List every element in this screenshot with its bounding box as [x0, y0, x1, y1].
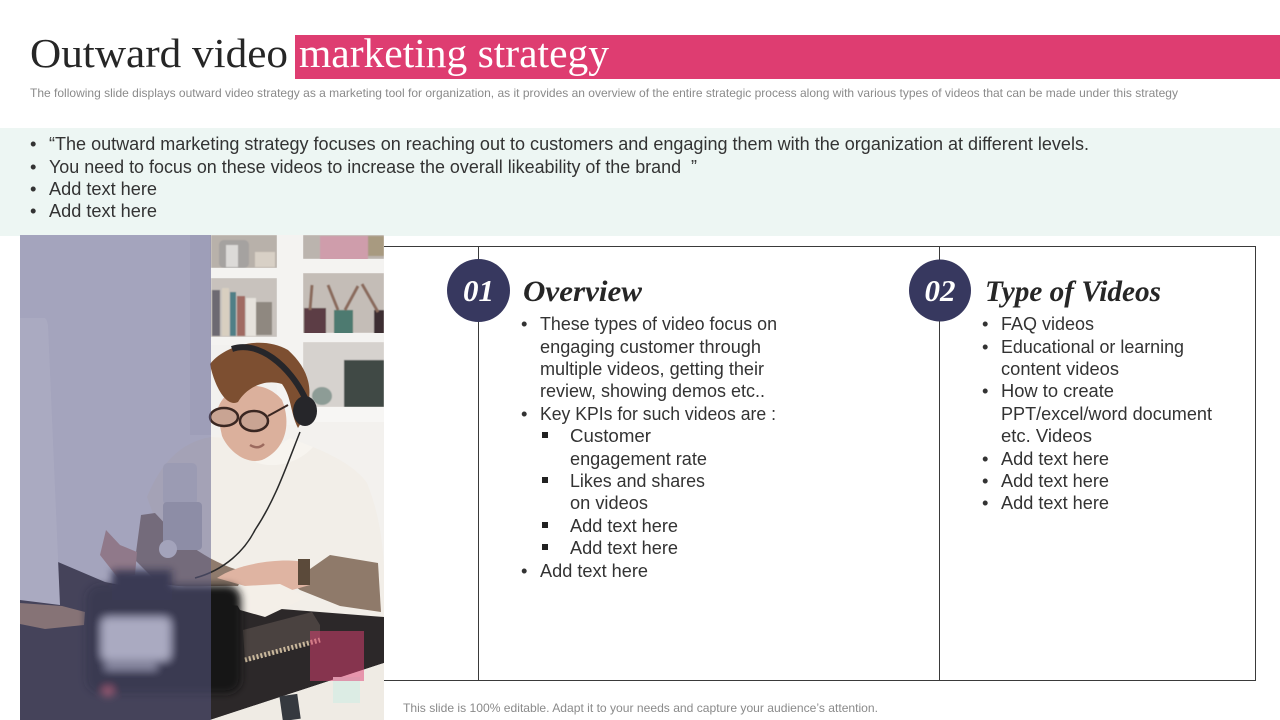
- video types bullet list: Educational or learning: [1001, 336, 1184, 357]
- title banner: [295, 35, 1280, 79]
- video types bullet list: content videos: [1001, 358, 1119, 379]
- number badge 01: 01: [463, 273, 494, 308]
- overview bullet list: •: [521, 403, 527, 424]
- content frame: [384, 246, 1256, 680]
- video types bullet list: •: [982, 336, 988, 357]
- quote band: [0, 128, 1280, 236]
- quote band: •: [30, 156, 36, 177]
- overview bullet list: Key KPIs for such videos are :: [540, 403, 776, 424]
- title: marketing strategy: [299, 30, 609, 76]
- panel: overview: [447, 259, 777, 581]
- quote band: •: [30, 133, 36, 154]
- video types bullet list: PPT/excel/word document: [1001, 403, 1212, 424]
- video types bullet list: •: [982, 380, 988, 401]
- overview bullet list: Add text here: [540, 560, 648, 581]
- desk: [20, 562, 384, 720]
- subtitle: The following slide displays outward video strategy as a marketing tool for organization, as it provides an overview of the entire strategic process along with various types of videos that can be made under this strategy: [30, 86, 1178, 100]
- pink accent square: [310, 631, 364, 681]
- title: [30, 30, 609, 76]
- quote band: “The outward marketing strategy focuses on reaching out to customers and engaging them with the organization at different levels.: [49, 133, 1089, 154]
- video types bullet list: •: [982, 470, 988, 491]
- microphone: [163, 463, 197, 505]
- camera: [86, 570, 241, 697]
- video types bullet list: •: [982, 313, 988, 334]
- video types bullet list: etc. Videos: [1001, 425, 1092, 446]
- footer note: This slide is 100% editable. Adapt it to your needs and capture your audience’s attention.: [403, 701, 878, 715]
- overview bullet list: on videos: [570, 492, 648, 513]
- overview bullet list: Likes and shares: [570, 470, 705, 491]
- overview bullet list: These types of video focus on: [540, 313, 777, 334]
- quote band: Add text here: [49, 178, 157, 199]
- heading: type of videos: Type of Videos: [985, 275, 1161, 308]
- overview bullet list: Add text here: [570, 515, 678, 536]
- overview bullet list: multiple videos, getting their: [540, 358, 764, 379]
- video types bullet list: Add text here: [1001, 492, 1109, 513]
- video types bullet list: •: [982, 448, 988, 469]
- number badge 01: [447, 259, 510, 322]
- number badge 02: 02: [924, 273, 956, 308]
- video types bullet list: How to create: [1001, 380, 1114, 401]
- overview bullet list: Customer: [570, 425, 651, 446]
- video types bullet list: FAQ videos: [1001, 313, 1094, 334]
- overview bullet list: •: [521, 560, 527, 581]
- overview bullet list: engaging customer through: [540, 336, 761, 357]
- woman's face and headphones: [217, 386, 286, 461]
- quote band: You need to focus on these videos to increase the overall likeability of the brand ”: [49, 156, 697, 177]
- heading: overview: Overview: [523, 275, 643, 308]
- video types bullet list: Add text here: [1001, 470, 1109, 491]
- overview bullet list: [521, 313, 777, 581]
- sweater: [147, 437, 384, 620]
- number badge 02: [909, 260, 971, 322]
- overview bullet list: review, showing demos etc..: [540, 380, 765, 401]
- video types bullet list: Add text here: [1001, 448, 1109, 469]
- panel: type of videos: [909, 260, 1212, 513]
- quote band: Add text here: [49, 200, 157, 221]
- video types bullet list: •: [982, 492, 988, 513]
- quote band: •: [30, 178, 36, 199]
- title: Outward video: [30, 30, 288, 76]
- overview bullet list: Add text here: [570, 537, 678, 558]
- overview bullet list: engagement rate: [570, 448, 707, 469]
- overview bullet list: •: [521, 313, 527, 334]
- quote band: •: [30, 200, 36, 221]
- video types bullet list: [982, 313, 1212, 513]
- photo: woman recording a video at a desk: [20, 235, 384, 720]
